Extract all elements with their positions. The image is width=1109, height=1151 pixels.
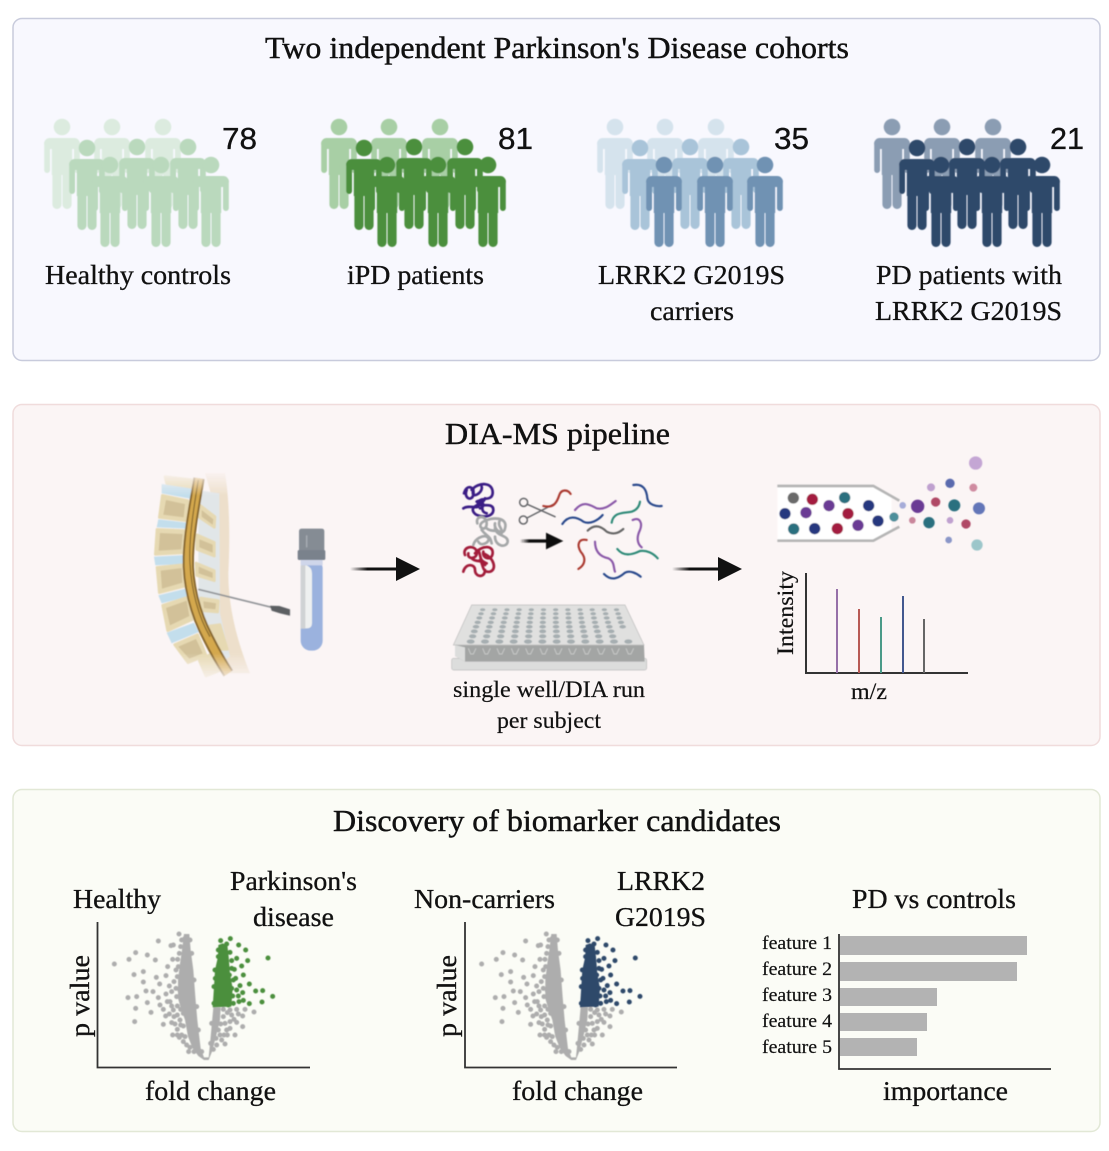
bar label: feature 2: feature 2 <box>762 959 832 980</box>
label: LRRK2 G2019S: LRRK2 G2019S <box>875 296 1062 326</box>
label: LRRK2 carriers: LRRK2 G2019S <box>598 260 785 290</box>
bar label: feature 3: feature 3 <box>762 985 832 1006</box>
label: disease: disease <box>253 902 334 932</box>
label: PD patients with: PD patients with <box>876 260 1063 290</box>
illustration: electrospray nozzle <box>777 456 985 551</box>
count: healthy controls: 78 <box>222 121 257 156</box>
icon: collection tube <box>298 529 325 651</box>
icon group: PD with LRRK2 crowd <box>874 119 1060 247</box>
icon group: LRRK2 carriers crowd <box>597 119 783 247</box>
protein: red tangle <box>463 547 494 576</box>
illustration: 96 well plate <box>452 605 647 670</box>
panel: cohorts <box>13 18 1100 360</box>
bar label: feature 4: feature 4 <box>762 1011 833 1032</box>
axis label: p value: p value <box>65 955 95 1037</box>
chart: volcano Healthy vs Parkinson's <box>65 866 357 1106</box>
label: G2019S: G2019S <box>615 902 706 932</box>
label: healthy controls: Healthy controls <box>45 260 231 290</box>
label: Non-carriers: Non-carriers <box>414 884 555 914</box>
arrow: sampling to digestion <box>350 557 420 581</box>
protein: grey tangle <box>473 517 508 546</box>
label: iPD patients: iPD patients <box>347 260 484 290</box>
panel: DIA-MS pipeline <box>13 404 1100 746</box>
axis label: fold change: fold change <box>145 1076 276 1106</box>
illustration: spine with lumbar puncture <box>154 473 290 676</box>
count: iPD patients: 81 <box>498 121 533 156</box>
bar label: feature 1: feature 1 <box>762 933 832 954</box>
heading: cohorts: Two independent Parkinson's Disease cohorts <box>265 30 849 65</box>
axis label: m/z: m/z <box>851 679 887 705</box>
bar label: feature 5: feature 5 <box>762 1037 832 1058</box>
arrow: digestion <box>520 533 563 549</box>
axis label: importance: importance <box>883 1076 1008 1106</box>
chart: volcano Non-carriers vs LRRK2 <box>414 866 706 1106</box>
label: Healthy: Healthy <box>73 884 161 914</box>
axis label: Intensity: Intensity <box>773 571 799 655</box>
count: LRRK2 carriers: 35 <box>774 121 809 156</box>
icon group: healthy controls crowd <box>44 119 229 247</box>
protein: purple tangle <box>463 484 493 516</box>
icon: scissors <box>519 498 555 524</box>
heading: discovery: Discovery of biomarker candidates <box>333 803 781 838</box>
axis label: fold change: fold change <box>512 1076 643 1106</box>
label: LRRK2: LRRK2 <box>617 866 705 896</box>
illustration: protein tangles and digestion <box>463 484 662 578</box>
heading: pipeline: DIA-MS pipeline <box>445 416 670 451</box>
axis label: p value: p value <box>432 955 462 1037</box>
chart: mass spectrum <box>773 571 968 705</box>
peptide fragments <box>543 485 662 578</box>
chart: feature importance bars <box>762 884 1051 1106</box>
label: Parkinson's: Parkinson's <box>230 866 357 896</box>
arrow: digestion to mass spectrometry <box>672 557 742 581</box>
caption: plate line one: single well/DIA run <box>453 677 645 703</box>
panel: biomarker discovery <box>13 790 1100 1132</box>
icon group: iPD patients crowd <box>321 119 506 247</box>
caption: plate line two: per subject <box>497 708 601 734</box>
label: PD vs controls: PD vs controls <box>852 884 1016 914</box>
count: PD with LRRK2: 21 <box>1050 121 1084 156</box>
label: carriers line two: carriers <box>650 296 734 326</box>
